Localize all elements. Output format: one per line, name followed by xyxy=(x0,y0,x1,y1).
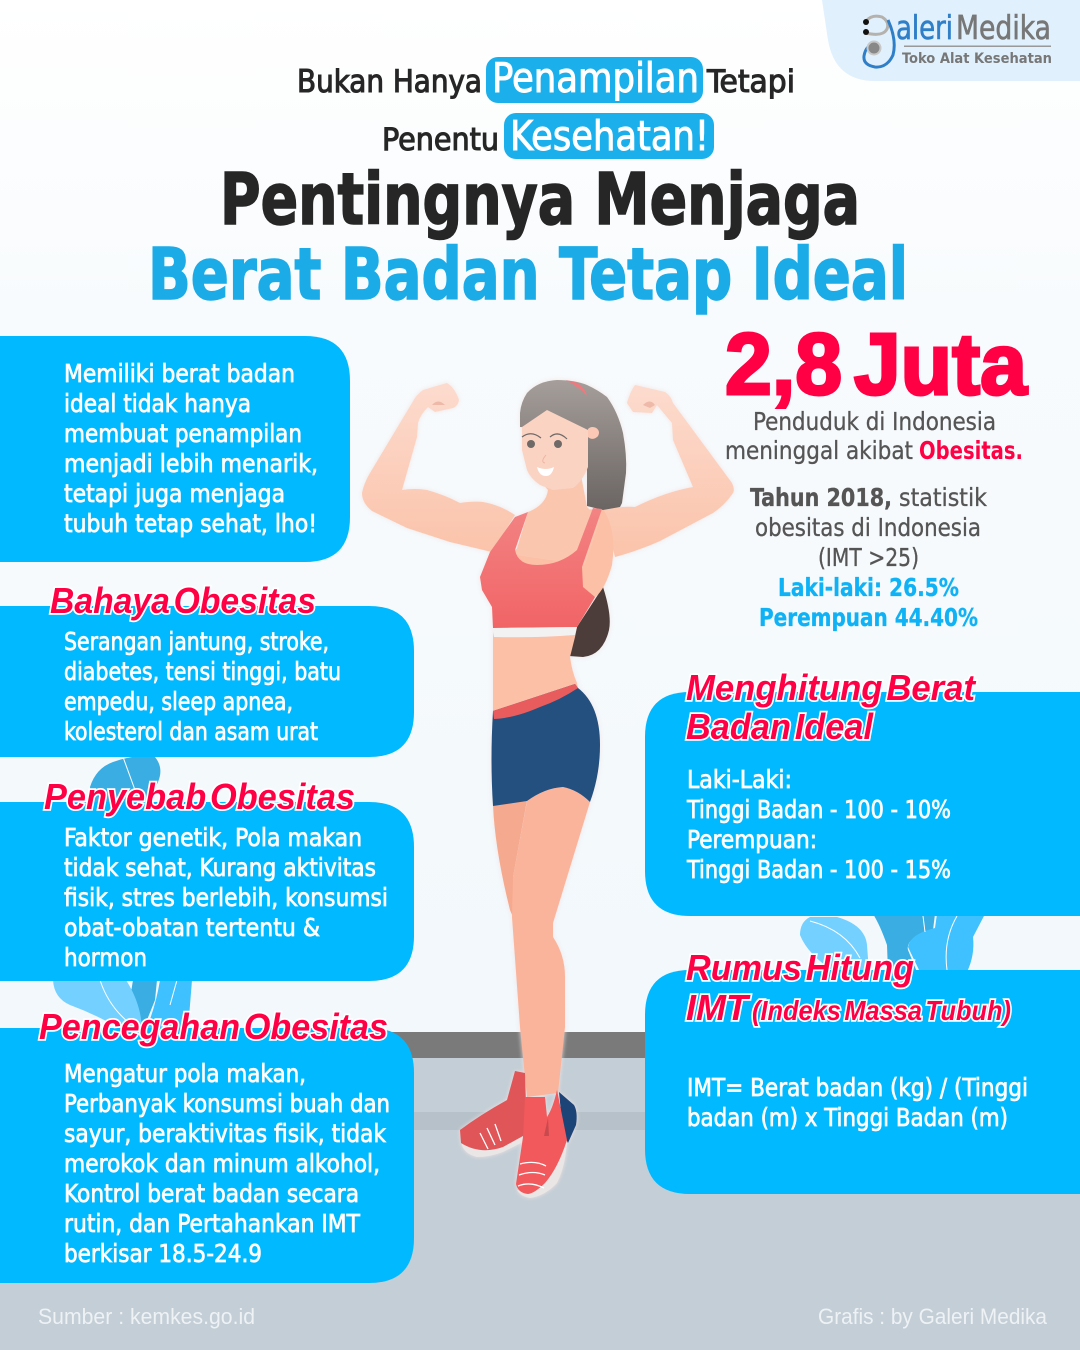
panel: penyebab obesitas: tidak sehat, Kurang aktivitas xyxy=(64,853,376,882)
panel: menghitung berat badan ideal: Badan Ideal xyxy=(686,706,874,747)
panel: rumus hitung imt: IMT= Berat badan (kg) / (Tinggi xyxy=(687,1073,1028,1102)
panel: pencegahan obesitas xyxy=(0,1006,414,1283)
source footer xyxy=(38,1304,1048,1329)
neck and chest xyxy=(515,470,600,565)
face details xyxy=(522,434,567,476)
panel: intro: ideal tidak hanya xyxy=(64,389,251,418)
panel: intro: tetapi juga menjaga xyxy=(64,479,285,508)
statistics text: Perempuan 44.40% xyxy=(759,603,978,632)
big statistic: meninggal akibat xyxy=(725,436,913,465)
headband xyxy=(566,380,587,396)
front shoe xyxy=(516,1090,577,1198)
panel: penyebab obesitas: Faktor genetik, Pola makan xyxy=(64,823,362,852)
panel: rumus hitung imt: Rumus Hitung xyxy=(686,947,914,988)
back shoe xyxy=(460,1071,527,1157)
panel: pencegahan obesitas: berkisar 18.5-24.9 xyxy=(64,1239,262,1268)
big statistic: Penduduk di Indonesia xyxy=(753,407,996,436)
panel: bahaya obesitas: diabetes, tensi tinggi, batu xyxy=(64,657,341,686)
title: Berat Badan Tetap Ideal xyxy=(148,233,908,316)
big statistic: 2,8 Juta xyxy=(725,316,1028,413)
waistband xyxy=(493,684,578,719)
right arm xyxy=(603,385,734,557)
panel: intro: membuat penampilan xyxy=(64,419,302,448)
panel: penyebab obesitas xyxy=(0,776,414,981)
panel: intro: Memiliki berat badan xyxy=(64,359,295,388)
panel: bahaya obesitas xyxy=(0,580,414,757)
panel: bahaya obesitas: Serangan jantung, stroke, xyxy=(64,627,329,656)
logo: aleri xyxy=(896,8,953,47)
panel: bahaya obesitas: kolesterol dan asam urat xyxy=(64,717,318,746)
panel: rumus hitung imt: (Indeks Massa Tubuh) xyxy=(752,995,1011,1026)
statistics text: obesitas di Indonesia xyxy=(755,513,981,542)
panel: pencegahan obesitas: sayur, beraktivitas fisik, tidak xyxy=(64,1119,386,1148)
panel: rumus hitung imt: badan (m) x Tinggi Badan (m) xyxy=(687,1103,1008,1132)
panel: pencegahan obesitas: Kontrol berat badan secara xyxy=(64,1179,359,1208)
subtitle: Bukan Hanya xyxy=(297,64,482,100)
big statistic xyxy=(725,316,1028,465)
title: Pentingnya Menjaga xyxy=(220,158,860,241)
panel: pencegahan obesitas: Pencegahan Obesitas xyxy=(39,1006,388,1047)
left arm xyxy=(362,383,515,552)
statistics text: Laki-laki: 26.5% xyxy=(778,573,959,602)
long hair behind xyxy=(569,587,610,657)
decorative leaves left lower xyxy=(53,980,192,1032)
statistics text: statistik xyxy=(899,483,987,512)
hair xyxy=(520,380,626,510)
panel: menghitung berat badan ideal xyxy=(645,667,1080,916)
panel: menghitung berat badan ideal: Tinggi Badan - 100 - 15% xyxy=(686,855,951,884)
big statistic: Obesitas. xyxy=(919,436,1023,465)
top band xyxy=(493,627,577,637)
statistics text: (IMT >25) xyxy=(818,543,919,572)
subtitle: Penampilan xyxy=(492,54,699,102)
panel: menghitung berat badan ideal: Menghitung Berat xyxy=(686,667,977,708)
statistics text xyxy=(750,483,987,632)
panel: menghitung berat badan ideal: Tinggi Badan - 100 - 10% xyxy=(686,795,951,824)
subtitle xyxy=(297,54,795,160)
torso xyxy=(493,509,613,715)
panel: intro: tubuh tetap sehat, lho! xyxy=(64,509,317,538)
panel: pencegahan obesitas: merokok dan minum alkohol, xyxy=(64,1149,380,1178)
woman figure xyxy=(362,380,734,1198)
decorative leaves right xyxy=(800,914,985,972)
panel: bahaya obesitas: empedu, sleep apnea, xyxy=(64,687,293,716)
subtitle: Tetapi xyxy=(706,64,795,100)
front leg xyxy=(512,787,590,1097)
face xyxy=(522,410,588,490)
panel: pencegahan obesitas: rutin, dan Pertahankan IMT xyxy=(64,1209,360,1238)
title xyxy=(148,158,908,316)
decorative leaves left upper xyxy=(90,756,160,805)
panel: penyebab obesitas: obat-obatan tertentu & xyxy=(64,913,320,942)
panel: penyebab obesitas: hormon xyxy=(64,943,147,972)
panel: bahaya obesitas: Bahaya Obesitas xyxy=(50,580,316,621)
statistics text: Tahun 2018, xyxy=(750,483,892,512)
panel: menghitung berat badan ideal: Laki-Laki: xyxy=(687,765,792,794)
subtitle: Kesehatan! xyxy=(510,112,709,160)
subtitle: Penentu xyxy=(382,122,499,158)
logo: Toko Alat Kesehatan xyxy=(902,51,1052,67)
panel: pencegahan obesitas: Mengatur pola makan, xyxy=(64,1059,306,1088)
panel: intro: menjadi lebih menarik, xyxy=(64,449,318,478)
logo: Medika xyxy=(956,8,1051,47)
panel: penyebab obesitas: Penyebab Obesitas xyxy=(44,776,355,817)
panel: rumus hitung imt: IMT xyxy=(686,987,751,1028)
shorts xyxy=(492,684,600,806)
sports top xyxy=(480,508,602,628)
panel: penyebab obesitas: fisik, stres berlebih, konsumsi xyxy=(64,883,388,912)
source footer: Grafis : by Galeri Medika xyxy=(818,1304,1048,1329)
back leg xyxy=(493,800,527,917)
panel: intro xyxy=(0,336,350,562)
logo xyxy=(822,0,1080,81)
panel: menghitung berat badan ideal: Perempuan: xyxy=(687,825,817,854)
panel: pencegahan obesitas: Perbanyak konsumsi buah dan xyxy=(64,1089,390,1118)
fist creases xyxy=(432,402,655,408)
panel: rumus hitung imt xyxy=(645,947,1080,1194)
source footer: Sumber : kemkes.go.id xyxy=(38,1304,255,1329)
